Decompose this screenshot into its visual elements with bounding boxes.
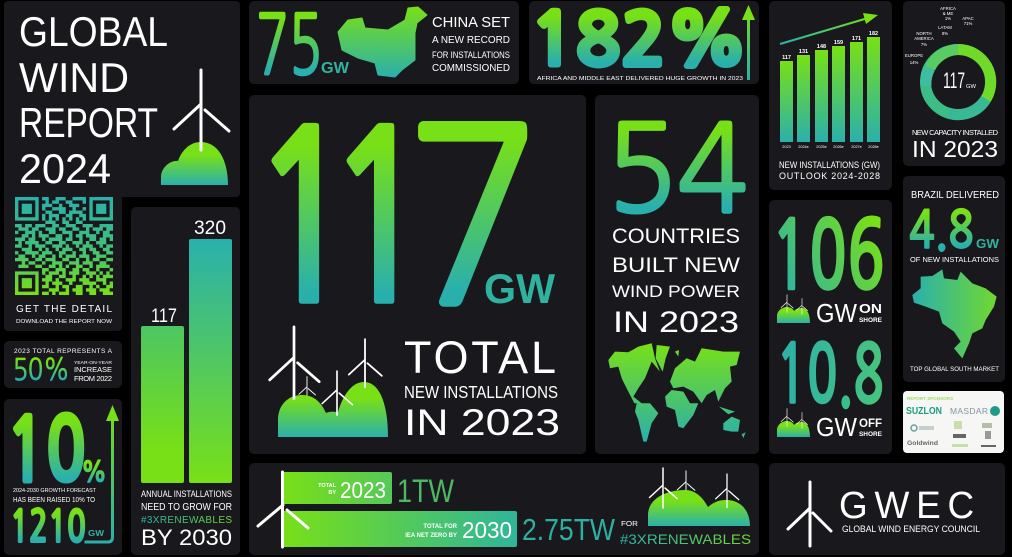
panel: 54 countries: WIND POWER (612, 282, 740, 301)
panel: 54 countries: BUILT NEW (612, 254, 740, 277)
panel: GWEC logo: GLOBAL WIND ENERGY COUNCIL (842, 524, 980, 535)
panel: 50% increase: 50% (13, 355, 70, 385)
year labels: 2027e (851, 145, 862, 149)
QR caption: GET THE DETAIL (16, 304, 112, 315)
panel: 50% increase: INCREASE (74, 365, 112, 374)
panel: 10% forecast: 2024-2030 GROWTH FORECAST (13, 488, 96, 494)
year labels: 2026e (833, 145, 844, 149)
panel: report sponsors (903, 391, 1004, 453)
icon: turbine (258, 472, 308, 547)
donut chart (926, 49, 991, 115)
bar: 320 (189, 218, 232, 483)
panel: outlook chart: OUTLOOK 2024-2028 (779, 171, 880, 181)
panel: onshore and offshore (769, 200, 892, 454)
title: 2024 (19, 145, 111, 192)
bar: total by 2030: TOTAL FOR (423, 524, 458, 530)
panel: title and QR code (4, 1, 240, 331)
donut labels: & ME (943, 11, 953, 16)
panel: donut capacity: NEW CAPACITY INSTALLED (912, 128, 999, 137)
panel: China 75 GW: CHINA SET (432, 14, 510, 31)
panel: 10% forecast: GW (88, 529, 105, 538)
bar: total by 2030: 2.75TW (522, 512, 616, 547)
bar values: 148 (817, 44, 826, 50)
bar: total by 2023 (282, 472, 455, 509)
bar: total by 2030: 2030 (462, 517, 512, 543)
panel: 117 GW total: GW (484, 265, 555, 312)
headline number (247, 97, 542, 339)
panel: onshore and offshore: GW (816, 298, 857, 328)
bar values: 182 (869, 31, 878, 37)
panel: total capacity bars (249, 463, 759, 555)
panel: Brazil: 4.8 (909, 204, 974, 256)
donut labels: 14% (910, 60, 918, 65)
arrow (780, 13, 878, 44)
QR caption: DOWNLOAD THE REPORT NOW (16, 319, 113, 325)
panel: Brazil (903, 176, 1005, 382)
title: GLOBAL (19, 8, 168, 55)
panel: China 75 GW: COMMISSIONED (432, 63, 510, 74)
QR code (15, 199, 113, 293)
QR caption (16, 304, 113, 325)
panel: 10% forecast: % (81, 459, 107, 487)
panel: Brazil: BRAZIL DELIVERED (911, 190, 999, 201)
donut labels: APAC (962, 16, 974, 21)
panel: 50% increase: 2023 TOTAL REPRESENTS A (14, 348, 113, 355)
panel: Brazil: OF NEW INSTALLATIONS (910, 255, 999, 264)
panel: 54 countries: COUNTRIES (612, 225, 740, 248)
donut labels: 71% (964, 21, 972, 26)
panel: 10% forecast: 1210 (10, 505, 86, 549)
title: REPORT (19, 99, 158, 146)
donut labels: NORTH (916, 31, 932, 36)
map: world (608, 343, 746, 442)
year labels (782, 145, 879, 149)
bar: total by 2023: BY (328, 490, 336, 496)
panel: outlook chart: NEW INSTALLATIONS (GW) (779, 160, 880, 170)
title (19, 8, 168, 192)
arrow (742, 5, 755, 80)
bar: total by 2023: TOTAL (318, 483, 337, 489)
panel: Brazil: GW (976, 236, 1000, 251)
panel: 54 countries: IN 2023 (613, 306, 739, 339)
headline number: 11 (247, 104, 438, 339)
panel: 10% forecast: HAS BEEN RAISED 10% TO (13, 497, 95, 504)
year labels: 2025e (816, 145, 827, 149)
bar values: 159 (834, 40, 843, 46)
icon: onshore turbines (777, 295, 810, 323)
panel: 117 GW total: IN 2023 (404, 402, 560, 443)
panel: 10% forecast (4, 399, 122, 555)
headline number: 7 (405, 97, 542, 338)
panel: report sponsors: SUZLON (906, 406, 942, 417)
panel: total capacity bars: FOR (621, 521, 638, 528)
donut labels: 8% (942, 31, 948, 36)
donut labels: AMERICA (914, 36, 934, 41)
year labels: 2028e (868, 145, 879, 149)
map: China (338, 7, 427, 77)
panel: China 75 GW: A NEW RECORD (432, 34, 510, 46)
donut labels: LATAM (938, 25, 952, 30)
map: Brazil (912, 269, 997, 358)
panel: donut capacity: IN 2023 (912, 136, 998, 162)
bar: total by 2023: 1TW (397, 473, 455, 509)
panel: donut capacity: 117 (943, 68, 965, 93)
panel: onshore and offshore: SHORE (859, 317, 883, 324)
arrow (84, 405, 119, 542)
panel: annual installations bar chart (131, 207, 240, 555)
panel: outlook chart (769, 1, 892, 190)
panel: China 75 GW: GW (321, 60, 350, 77)
bars (780, 37, 880, 142)
panel: onshore and offshore: SHORE (859, 431, 883, 438)
donut labels: 1% (945, 16, 951, 21)
panel: GWEC logo (769, 463, 1005, 555)
icon: turbine on hill (161, 70, 229, 185)
panel: onshore and offshore: OFF (859, 416, 882, 430)
icon: GWEC turbine (788, 482, 831, 546)
title: WIND (19, 54, 129, 101)
bar values (782, 31, 878, 61)
donut labels: EUROPE (905, 53, 923, 58)
panel: report sponsors: MASDAR (950, 406, 988, 416)
icon: turbines on hills (270, 327, 388, 437)
panel: 10% forecast: 10 (6, 408, 86, 495)
panel: 117 GW total: NEW INSTALLATIONS (404, 382, 558, 402)
caption (141, 489, 232, 550)
panel: 54 countries: 54 (606, 109, 748, 230)
bar: 117: 117 (151, 306, 177, 327)
bar: total by 2030: IEA NET ZERO BY (405, 533, 457, 539)
bar: total by 2030 (281, 511, 616, 547)
panel: onshore and offshore: ON (859, 301, 882, 316)
panel: report sponsors: Goldwind (907, 441, 938, 447)
panel: 50% increase (4, 341, 122, 388)
caption: #3XRENEWABLES (141, 515, 232, 526)
panel: China 75 GW: FOR INSTALLATIONS (432, 50, 510, 60)
caption: ANNUAL INSTALLATIONS (141, 489, 232, 500)
panel: 182% growth: AFRICA AND MIDDLE EAST DELIVERED HUGE GROWTH IN 2023 (537, 76, 743, 82)
panel: onshore and offshore: 106 (771, 210, 885, 304)
panel: donut capacity: GW (966, 84, 976, 90)
caption: NEED TO GROW FOR (141, 502, 232, 513)
panel: China 75 GW (249, 1, 519, 86)
bar values: 171 (852, 36, 861, 42)
donut labels: AFRICA (940, 6, 956, 11)
panel: China 75 GW: 75 (256, 4, 322, 86)
bar: total by 2023: 2023 (340, 477, 386, 503)
year labels: 2024e (798, 145, 809, 149)
bar values: 131 (799, 49, 808, 55)
panel: 50% increase: FROM 2022 (74, 374, 112, 383)
panel: 50% increase: YEAR-ON-YEAR (74, 360, 113, 365)
icon: turbines on hills (648, 468, 750, 526)
donut labels (905, 6, 974, 65)
panel: donut capacity (903, 1, 1005, 166)
bar: 320: 320 (194, 218, 226, 239)
panel: 182% growth: 182% (530, 4, 748, 76)
icon: offshore turbines (777, 409, 810, 437)
panel: 117 GW total (247, 95, 586, 454)
donut labels: 7% (921, 42, 927, 47)
panel: 117 GW total: TOTAL (404, 332, 556, 383)
panel: total capacity bars: #3XRENEWABLES (620, 531, 751, 547)
panel: GWEC logo: GWEC (839, 485, 981, 527)
panel: Brazil: TOP GLOBAL SOUTH MARKET (910, 366, 999, 373)
year labels: 2023 (782, 145, 791, 149)
panel: 54 countries (595, 95, 759, 454)
panel: onshore and offshore: 10.8 (776, 336, 884, 416)
panel: onshore and offshore: GW (816, 412, 857, 442)
bar values: 117 (782, 55, 791, 61)
bar: 117 (141, 306, 184, 483)
caption: BY 2030 (141, 525, 232, 550)
panel: report sponsors: REPORT SPONSORS (907, 396, 953, 401)
